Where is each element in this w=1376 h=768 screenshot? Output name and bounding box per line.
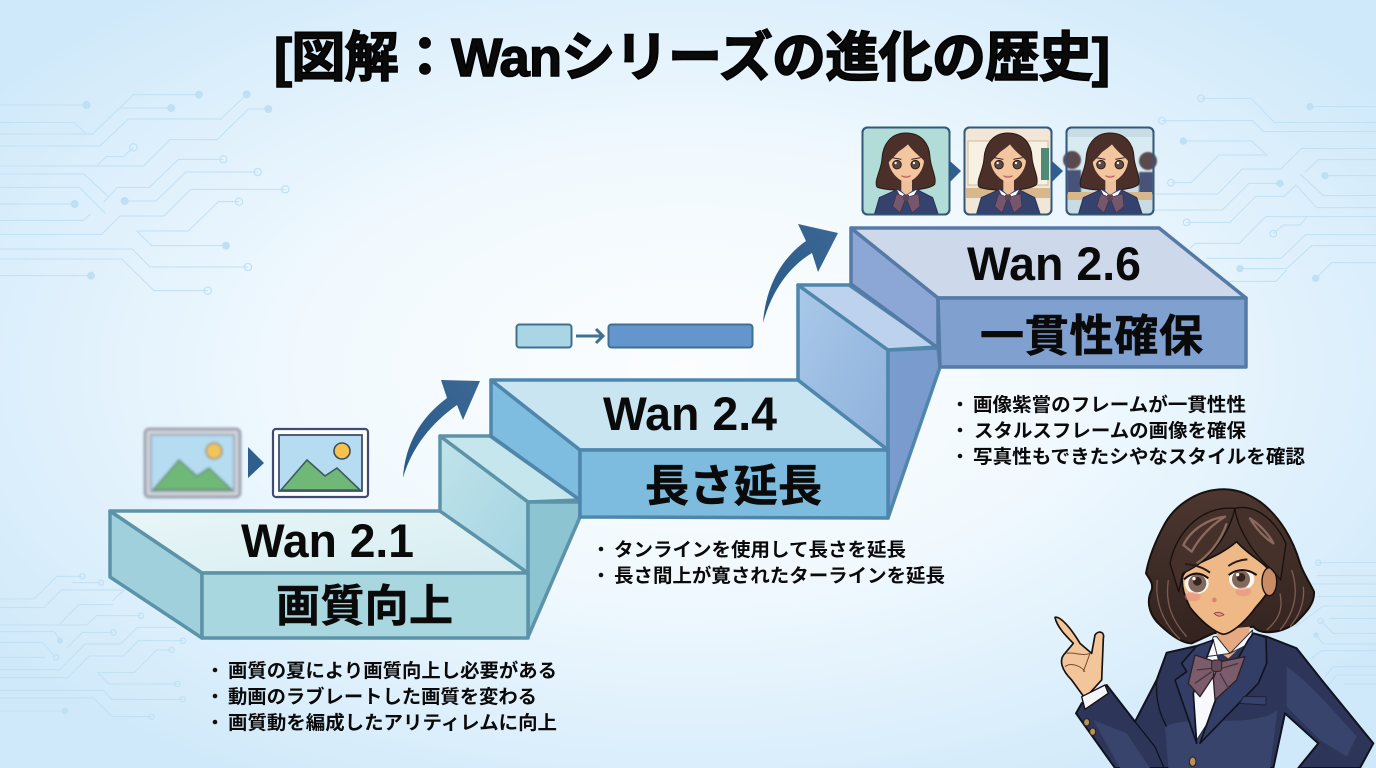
triangle — [1052, 161, 1063, 182]
nose — [1212, 598, 1217, 602]
bullets: step 1: 動画のラブレートした画質を変わる — [228, 685, 537, 708]
hair front — [1170, 507, 1286, 592]
bow tie — [1188, 655, 1245, 700]
step 1: Wan 2.1 — [110, 436, 580, 638]
eyebrows — [1185, 559, 1247, 573]
step 3: Wan 2.6 — [851, 228, 1246, 367]
circuit pattern: bottom right — [1295, 560, 1376, 687]
icon: blurry image — [145, 429, 240, 497]
eyes — [1184, 569, 1257, 594]
triangle — [950, 161, 961, 182]
circuit pattern: top right — [1155, 95, 1376, 282]
circuit pattern: top left — [0, 90, 289, 294]
icon: triangle between images — [248, 447, 264, 478]
hair strands — [1157, 570, 1304, 639]
neck — [1217, 627, 1250, 658]
cuff — [1082, 685, 1108, 709]
bullets: step 1: 画質動を編成したアリティレムに向上 — [228, 711, 557, 734]
fingers — [1065, 653, 1090, 672]
icon: sharp image — [273, 429, 368, 497]
bow folds — [1195, 663, 1238, 688]
step 1 label: Wan 2.1 — [241, 514, 414, 567]
icon: three character frames — [862, 128, 1157, 214]
hand — [1055, 617, 1104, 698]
sleeve fold line — [1135, 680, 1167, 768]
blush — [1185, 592, 1201, 601]
bullets: step 1: 画質の夏により画質向上し必要がある — [228, 659, 557, 682]
bullets: step 2: 長さ間上が寛されたターラインを延長 — [614, 564, 945, 587]
step 1 heading: 画質向上 — [276, 582, 453, 631]
hair shine — [1183, 517, 1273, 563]
bullets: step 3: スタルスフレームの画像を確保 — [974, 420, 1246, 442]
icon: short clip to long clip — [516, 324, 752, 348]
step 3 heading: 一貫性確保 — [980, 312, 1203, 361]
hair back — [1146, 489, 1314, 643]
bullets: step 3: 写真性もできたシやなスタイルを確認 — [973, 446, 1305, 468]
character: pointing girl in blazer — [1055, 489, 1373, 768]
pocket — [1240, 697, 1266, 705]
lapels — [1175, 633, 1267, 743]
circuit pattern: bottom left — [0, 574, 186, 719]
step 2 label: Wan 2.4 — [603, 387, 777, 440]
step 2: Wan 2.4 — [491, 285, 940, 518]
shirt — [1193, 630, 1253, 740]
blush — [1235, 587, 1251, 596]
frame 2: classroom — [964, 128, 1052, 214]
arrow: step 1 to step 2 — [403, 380, 480, 478]
step 2 heading: 長さ延長 — [645, 462, 822, 511]
bow knot — [1212, 660, 1222, 671]
jacket shading — [1093, 667, 1357, 768]
jacket — [1076, 633, 1373, 768]
bullets: step 1 — [213, 659, 557, 734]
face — [1182, 542, 1271, 634]
step 3 label: Wan 2.6 — [967, 237, 1141, 290]
frame 3: classmates — [1063, 128, 1157, 214]
bullets: step 3 — [958, 393, 1305, 468]
title: [図解：Wanシリーズの進化の歴史] — [274, 28, 1110, 88]
ear — [1262, 568, 1277, 596]
bullets: step 2 — [599, 539, 945, 587]
bullets: step 3: 画像紫嘗のフレームが一貫性性 — [973, 393, 1246, 416]
arrow: step 2 to step 3 — [763, 224, 838, 323]
mouth — [1214, 612, 1224, 616]
frame 1: plain background — [862, 128, 950, 214]
buttons — [1084, 719, 1196, 766]
bullets: step 2: タンラインを使用して長さを延長 — [614, 539, 906, 561]
